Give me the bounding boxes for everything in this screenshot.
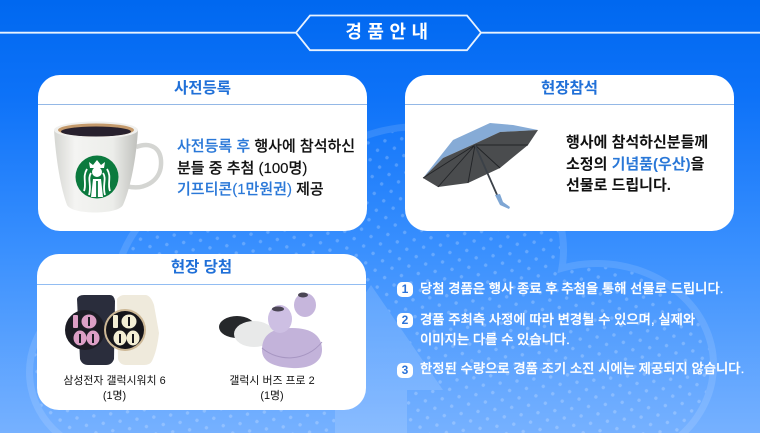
notes list [397, 281, 744, 378]
Starbucks logo [76, 156, 118, 198]
note 2: 2 [402, 313, 408, 327]
panel heading: 사전등록 [174, 80, 231, 97]
note 1: 당첨 경품은 행사 종료 후 추첨을 통해 선물로 드립니다. [420, 281, 723, 296]
icon: Galaxy Watch 6 [65, 295, 159, 365]
title banner [0, 14, 760, 52]
caption: buds: (1명) [260, 390, 284, 402]
note 3: 3 [402, 363, 408, 377]
caption: watch: (1명) [103, 390, 126, 402]
icon: Galaxy Buds 2 Pro [219, 292, 322, 368]
title text: 경품안내 [345, 22, 434, 42]
note 2 [397, 312, 695, 347]
text block: 선물로 드립니다. [566, 177, 671, 194]
panel: pre-registration [38, 75, 367, 231]
icon: Starbucks mug [54, 122, 164, 212]
background cloud with dots and up arrow [26, 124, 717, 433]
text block: 기프티콘(1만원권) 제공 [177, 181, 324, 198]
text block: 사전등록 후 행사에 참석하신 [177, 138, 355, 155]
caption: watch: 삼성전자 갤럭시워치 6 [63, 375, 166, 387]
text block [177, 138, 355, 198]
text block: 소정의 기념품(우산)을 [566, 156, 704, 172]
text block [566, 134, 708, 194]
caption: buds: 갤럭시 버즈 프로 2 [229, 375, 315, 387]
watch face numerals [73, 314, 100, 346]
panel heading [37, 254, 366, 285]
note 2: 경품 주최측 사정에 따라 변경될 수 있으며, 실제와 [420, 312, 695, 327]
caption: watch [63, 374, 166, 402]
panel heading [38, 75, 367, 105]
caption: buds [229, 374, 315, 402]
panel heading [405, 75, 734, 105]
panel heading: 현장 당첨 [171, 259, 232, 276]
panel heading: 현장참석 [541, 80, 598, 97]
panel: on-site prize [37, 254, 366, 410]
note 3: 한정된 수량으로 경품 조기 소진 시에는 제공되지 않습니다. [420, 361, 744, 376]
panel: on-site attendance [405, 75, 734, 231]
text block: 행사에 참석하신분들께 [566, 134, 708, 151]
icon: umbrella [422, 123, 538, 209]
text block: 분들 중 추첨 (100명) [177, 160, 307, 176]
note 2: 이미지는 다를 수 있습니다. [420, 332, 570, 347]
note 1: 1 [402, 282, 408, 296]
